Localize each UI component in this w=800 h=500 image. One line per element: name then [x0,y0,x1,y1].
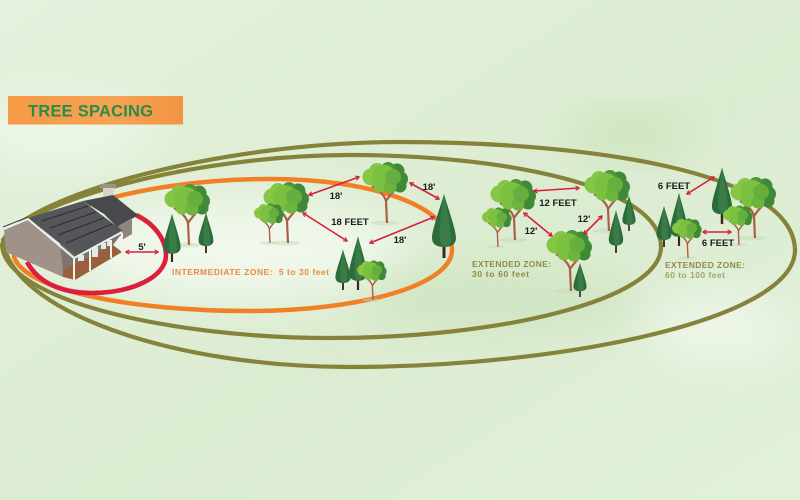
distance labels: 12' [525,226,537,237]
distance labels [138,181,734,253]
label: extended zone 30 to 60 feet: EXTENDED ZONE: [472,259,551,269]
zone ring: extended 30 to 60 feet [2,155,661,338]
porch back wall [60,232,123,270]
main roof [28,201,123,257]
distance labels: 12 FEET [539,198,577,209]
porch posts [74,233,122,281]
trees in extended zone 30 to 60 feet [482,170,636,297]
title banner: TREE SPACING [28,102,153,120]
gable eave [3,217,28,227]
zone ring: immediate home zone [27,215,166,293]
distance labels: 18 FEET [331,217,369,228]
label: extended zone 60 to 100 feet: EXTENDED ZONE: [665,260,745,270]
label: extended zone 60 to 100 feet [665,260,745,280]
distance labels: 18' [394,235,406,246]
distance labels: 18' [423,182,435,193]
label: extended zone 30 to 60 feet [472,259,551,279]
distance labels: 12' [578,214,590,225]
trees in intermediate zone [254,162,456,302]
rear roof [83,195,138,228]
title banner [8,96,183,124]
label: extended zone 60 to 100 feet: 60 to 100 feet [665,270,725,280]
distance labels: 18' [330,191,342,202]
label: intermediate zone: INTERMEDIATE ZONE: 5 to 30 feet [172,267,329,277]
zone ring: intermediate 5 to 30 feet [14,179,452,311]
distance labels: 5' [138,242,146,253]
roof trim [4,219,122,258]
chimney [100,184,116,201]
trees in extended zone 60 to 100 feet [657,168,776,260]
label: extended zone 30 to 60 feet: 30 to 60 feet [472,269,529,279]
windows and door [78,240,110,261]
gable wall [4,220,68,277]
spacing arrows [126,177,731,252]
side wing wall [118,218,132,240]
porch floor [63,245,122,280]
distance labels: 6 FEET [658,181,690,192]
house [3,184,138,281]
roof shingle lines [42,206,112,243]
trees near house [163,184,213,262]
zone ring: extended 60 to 100 feet [3,142,795,367]
distance labels: 6 FEET [702,238,734,249]
